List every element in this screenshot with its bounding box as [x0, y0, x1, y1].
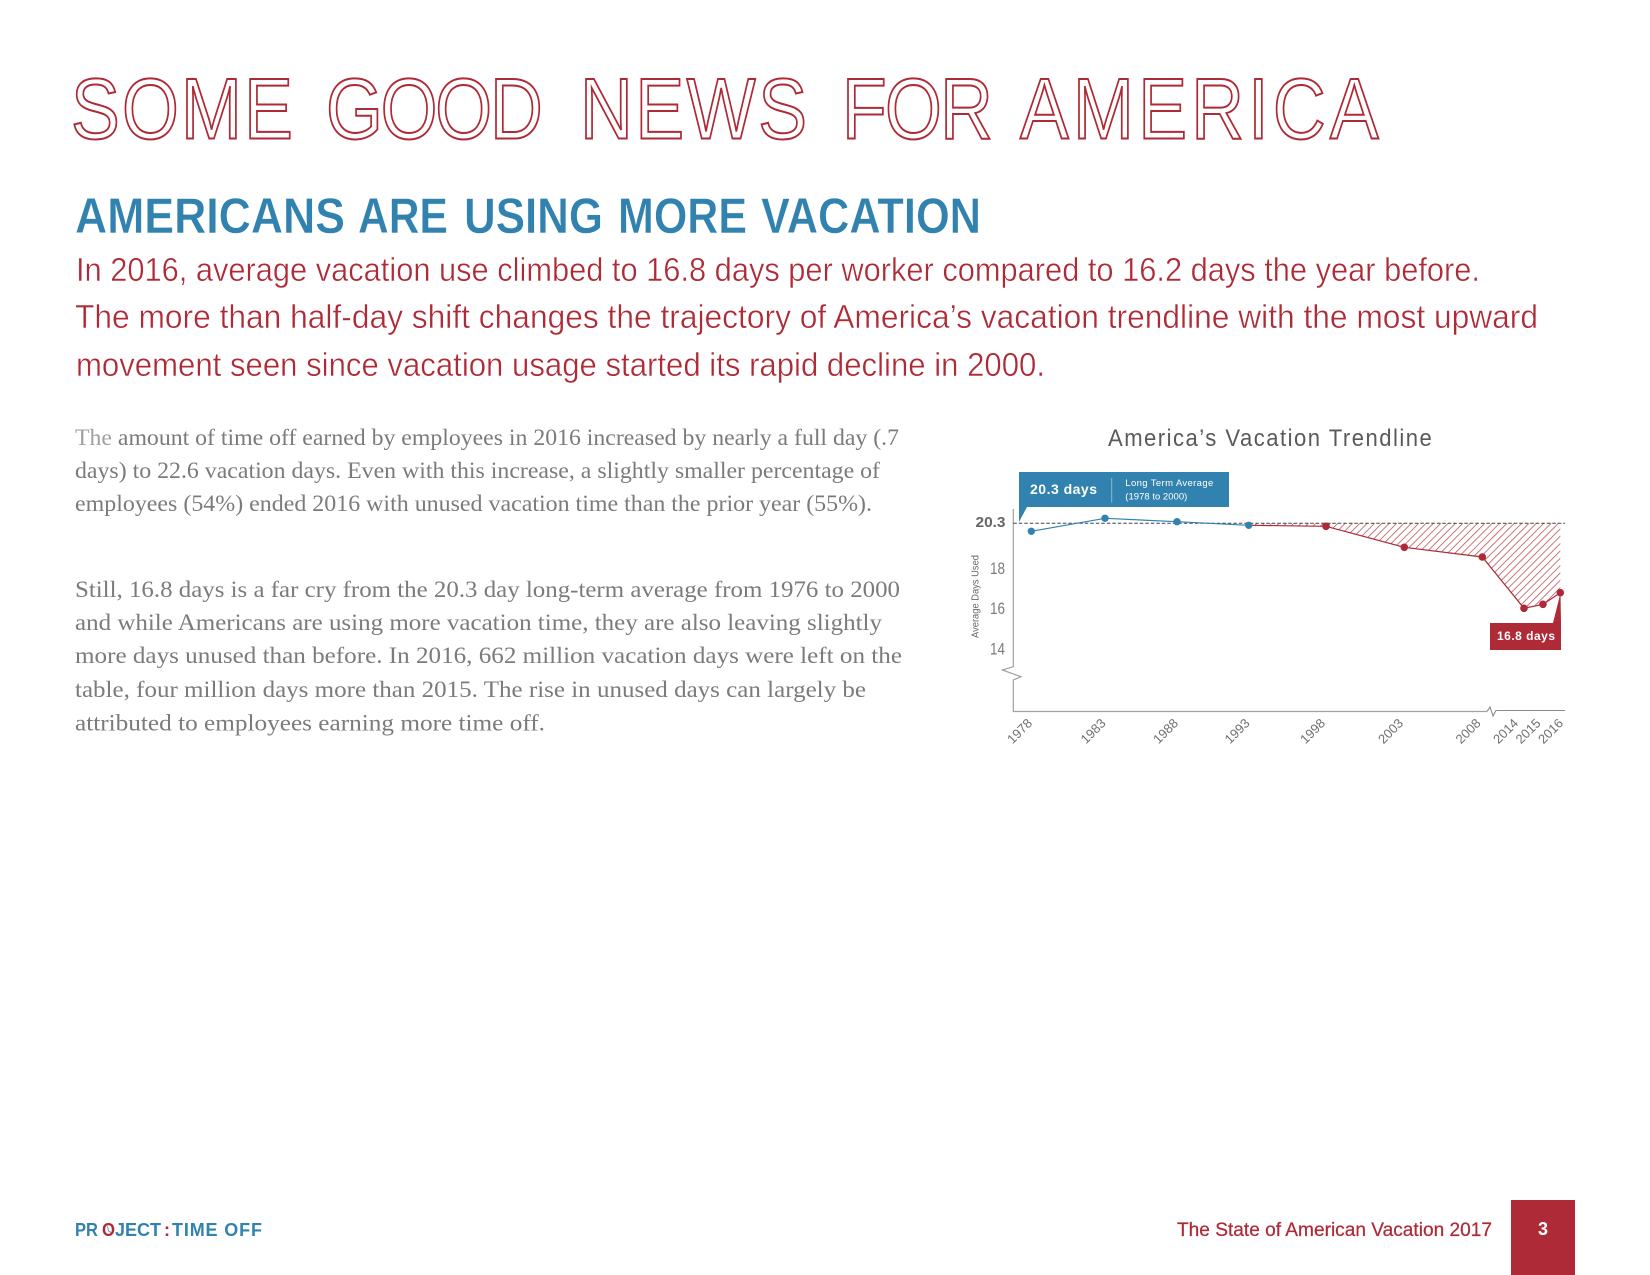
footer report title: The State of American Vacation 2017 — [1177, 1219, 1492, 1241]
red trend line and points — [1249, 522, 1564, 612]
logo clock O: O — [102, 1220, 115, 1240]
x axis labels: 1978 — [1004, 716, 1035, 747]
y axis labels: 14 — [990, 640, 1005, 658]
lead paragraph: movement seen since vacation usage started its rapid decline in 2000. — [76, 346, 1045, 383]
body text: paragraph 2: table, four million days more than 2015. The rise in unused days can largely be — [75, 677, 866, 702]
long-term average dashed line — [1013, 522, 1565, 524]
subheading: MORE — [618, 188, 747, 244]
body text: paragraph 2: and while Americans are using more vacation time, they are also leaving slightly — [75, 610, 883, 635]
body text: paragraph 1: employees (54%) ended 2016 with unused vacation time than the prior year (55%). — [75, 491, 872, 516]
callout: long term average: Long Term Average — [1125, 478, 1213, 489]
hatched gap area — [1249, 523, 1560, 608]
body text: paragraph 2: more days unused than before. In 2016, 662 million vacation days were left on the — [75, 643, 902, 668]
x axis labels: 2015 — [1513, 716, 1544, 747]
body text: paragraph 2: attributed to employees earning more time off. — [75, 710, 545, 736]
chart: America's Vacation Trendline — [970, 424, 1566, 747]
lead paragraph: The more than half-day shift changes the trajectory of America’s vacation trendline with the most upward — [75, 298, 1538, 335]
callout: long term average: (1978 to 2000) — [1125, 492, 1187, 502]
callout: 16.8 days — [1490, 593, 1561, 650]
blue trend line and points — [1028, 515, 1252, 535]
y axis — [1002, 509, 1487, 712]
x axis labels: 1993 — [1222, 716, 1253, 747]
y axis labels: 16 — [990, 599, 1005, 618]
title: SOME — [71, 61, 293, 157]
footer logo: Project:Time Off: PR — [75, 1220, 98, 1240]
x axis labels: 1988 — [1150, 716, 1181, 747]
y axis labels: 20.3 — [976, 514, 1006, 531]
subheading — [75, 188, 981, 244]
x axis labels: 2008 — [1453, 716, 1484, 747]
x axis labels: 2014 — [1490, 716, 1521, 747]
body text: paragraph 1 — [75, 425, 899, 516]
x axis labels: 2016 — [1535, 716, 1566, 747]
x axis labels: 1998 — [1297, 716, 1328, 747]
callout: long term average: 20.3 days — [1030, 481, 1097, 497]
lead paragraph: In 2016, average vacation use climbed to 16.8 days per worker compared to 16.2 days the year before. — [76, 251, 1480, 288]
subheading: AMERICANS — [75, 188, 345, 244]
footer logo: Project:Time Off: JECT — [115, 1220, 161, 1240]
y axis labels: 18 — [990, 559, 1005, 578]
body text: paragraph 1: days) to 22.6 vacation days. Even with this increase, a slightly smaller percentage of — [75, 458, 880, 483]
title: GOOD — [326, 61, 543, 157]
page number box: 3 — [1538, 1219, 1548, 1239]
page number box — [1511, 1200, 1575, 1275]
chart title: America’s Vacation Trendline — [1108, 424, 1432, 451]
title: NEWS — [580, 61, 807, 157]
y axis title: Average Days Used — [970, 555, 982, 638]
y axis labels — [976, 514, 1006, 658]
title: FOR — [842, 61, 993, 157]
lead paragraph — [75, 251, 1538, 383]
x axis labels — [1004, 716, 1566, 747]
x axis labels: 1983 — [1078, 716, 1109, 747]
subheading: USING — [464, 188, 603, 244]
body text: paragraph 2 — [75, 577, 902, 736]
footer logo: Project:Time Off — [75, 1220, 262, 1240]
x axis labels: 2003 — [1375, 716, 1406, 747]
title: AMERICA — [1020, 61, 1379, 157]
x axis break — [1487, 707, 1565, 716]
footer logo: Project:Time Off: : — [164, 1220, 170, 1240]
title — [71, 61, 1379, 157]
footer logo: Project:Time Off: TIME OFF — [172, 1220, 262, 1240]
callout: long term average — [1019, 472, 1229, 522]
body text: paragraph 1: The amount of time off earned by employees in 2016 increased by nearly a full day (.7 — [75, 425, 899, 450]
subheading: ARE — [358, 188, 448, 244]
callout: 16.8 days: 16.8 days — [1497, 629, 1555, 643]
subheading: VACATION — [761, 188, 981, 244]
body text: paragraph 2: Still, 16.8 days is a far cry from the 20.3 day long-term average from 1976 to 2000 — [75, 577, 900, 602]
